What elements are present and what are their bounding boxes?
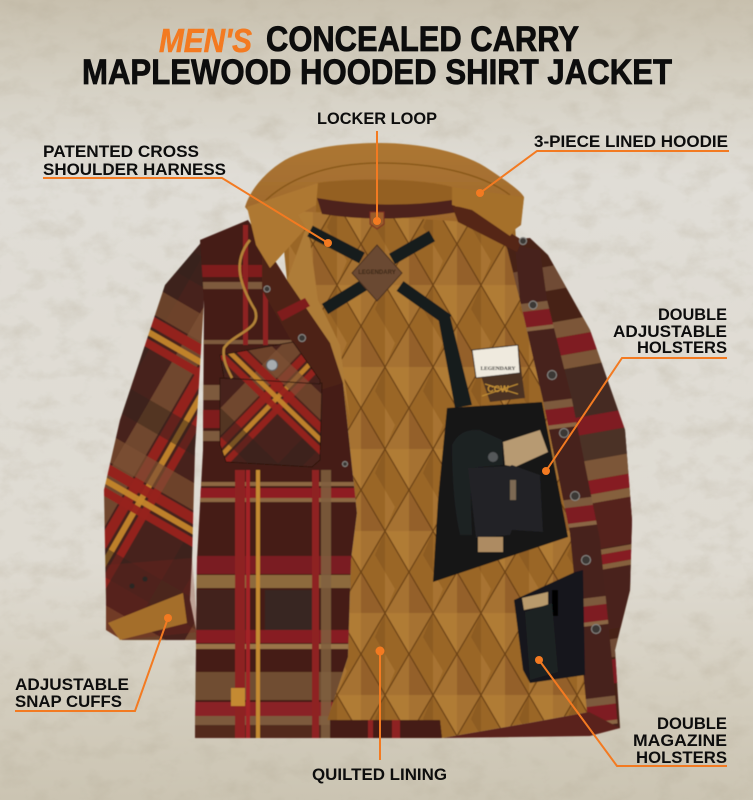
right placket — [515, 245, 618, 733]
callout: double magazine holsters — [535, 656, 727, 767]
right hem — [442, 712, 620, 738]
callout: double magazine holsters: MAGAZINE — [633, 732, 727, 750]
locker loop — [370, 212, 384, 229]
left lining fold — [287, 228, 350, 420]
double adjustable holster panel — [433, 402, 568, 582]
callout: double adjustable holsters — [542, 306, 727, 475]
right placket snaps — [520, 238, 600, 634]
holster body — [468, 465, 543, 538]
title accent: MEN'S: MEN'S — [159, 22, 252, 59]
cross shoulder harness — [310, 231, 448, 320]
title line 2: MAPLEWOOD HOODED SHIRT JACKET — [82, 53, 672, 92]
holster strap — [452, 430, 503, 535]
callout: double magazine holsters: DOUBLE — [657, 715, 727, 733]
callout: 3-piece lined hoodie — [476, 133, 729, 197]
left placket — [262, 257, 339, 388]
callout: double magazine holsters: HOLSTERS — [636, 749, 727, 767]
tab — [510, 480, 516, 500]
magazine holster — [514, 570, 585, 683]
hood — [245, 143, 524, 250]
left sleeve — [104, 238, 216, 640]
spare magazine grip — [503, 430, 548, 467]
callout: adjustable snap cuffs: ADJUSTABLE — [15, 676, 129, 694]
brand label: CCW — [487, 384, 509, 394]
callout: double adjustable holsters: HOLSTERS — [637, 339, 727, 357]
callout: quilted lining — [312, 646, 447, 784]
right sleeve and body — [507, 237, 633, 729]
callout: 3-piece lined hoodie: 3-PIECE LINED HOODIE — [534, 133, 728, 151]
drawcord — [224, 240, 256, 378]
right facing plaid — [452, 206, 522, 252]
right hood flap — [452, 187, 524, 236]
cuff loop — [198, 622, 216, 637]
vertical harness strap — [436, 306, 472, 408]
pocket flap — [220, 342, 320, 384]
leather patch — [352, 245, 402, 301]
callout: double adjustable holsters: DOUBLE — [658, 306, 727, 324]
callout: locker loop — [317, 110, 437, 225]
callout: adjustable snap cuffs: SNAP CUFFS — [15, 693, 122, 711]
title line 1: CONCEALED CARRY — [266, 20, 579, 59]
brand label — [472, 345, 525, 402]
brand label: LEGENDARY — [481, 366, 516, 372]
left placket snaps — [264, 286, 348, 466]
left body plaid — [190, 215, 450, 740]
callout: locker loop: LOCKER LOOP — [317, 110, 437, 128]
callout: patented cross shoulder harness: SHOULDER HARNESS — [43, 161, 226, 179]
collar plaid strip — [317, 198, 458, 219]
jacket illustration — [103, 142, 633, 739]
callout: patented cross shoulder harness — [43, 143, 332, 247]
quilted lining — [280, 210, 589, 738]
chest pocket — [220, 342, 322, 467]
callout: patented cross shoulder harness: PATENTED CROSS — [43, 143, 199, 161]
magazine base — [478, 537, 503, 552]
pocket snap — [266, 360, 278, 370]
holster snap — [488, 452, 498, 462]
callout: adjustable snap cuffs — [15, 614, 172, 711]
callout: double adjustable holsters: ADJUSTABLE — [613, 323, 727, 341]
leather patch: LEGENDARY — [358, 270, 396, 276]
pistol slide — [462, 433, 483, 466]
cuff snaps — [129, 583, 135, 589]
left hood flap — [247, 183, 318, 268]
callout: quilted lining: QUILTED LINING — [312, 766, 447, 784]
title — [82, 20, 672, 92]
cuff lining — [108, 593, 187, 640]
left placket stripes — [277, 298, 310, 321]
